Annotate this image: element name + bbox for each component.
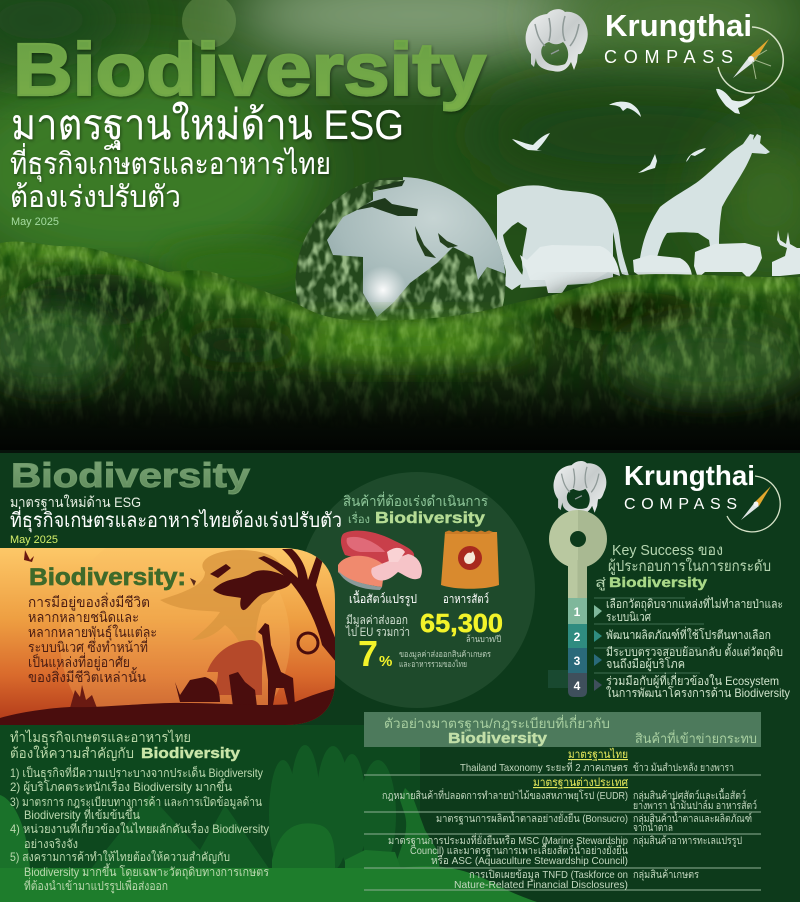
list: reasons: 4) หน่วยงานที่เกี่ยวข้องในไทยผลักดันเรื่อง Biodiversity xyxy=(10,820,269,836)
product labels: เนื้อสัตว์แปรรูป xyxy=(349,590,417,607)
stat: share of exports: 7 xyxy=(358,633,378,674)
stat: share of exports: และอาหารรวมของไทย xyxy=(399,659,467,669)
product name: COMPASS xyxy=(604,47,733,67)
subtitle line 1: มาตรฐานใหม่ด้าน ESG xyxy=(11,101,404,150)
row: international standards: ยางพารา น้ำมันปาล์ม อาหารสัตว์ xyxy=(633,798,757,812)
row: TNFD xyxy=(454,869,699,891)
icon: compass xyxy=(727,476,780,532)
heading: why it matters: ต้องให้ความสำคัญกับ xyxy=(10,745,134,761)
grass xyxy=(70,685,97,708)
Mediterranean xyxy=(357,198,418,216)
row: Bonsucro xyxy=(436,811,752,834)
icon: processed meat xyxy=(338,531,422,590)
stat: share of exports: % xyxy=(379,653,392,670)
icon: animal feed bag xyxy=(441,530,499,589)
circle heading: สินค้าที่ต้องเร่งดำเนินการ xyxy=(343,492,488,509)
logo: Krungthai Compass, hero xyxy=(526,8,783,93)
row: international standards: มาตรฐานต่างประเทศ xyxy=(533,777,629,789)
rhinoceros xyxy=(175,677,220,702)
heading: key success: Biodiversity xyxy=(609,574,707,590)
panel body text: การมีอยู่ของสิ่งมีชีวิต xyxy=(28,593,150,611)
row: Bonsucro: มาตรฐานการผลิตน้ำตาลอย่างยั่งยืน (Bonsucro) xyxy=(436,811,628,825)
moss texture xyxy=(0,242,800,420)
heading: why it matters: ทำไมธุรกิจเกษตรและอาหารไทย xyxy=(10,729,191,746)
step 1: ระบบนิเวศ xyxy=(606,610,651,624)
icon: crystal globe xyxy=(296,177,506,320)
reflected foliage xyxy=(295,180,507,330)
stat: export value: มีมูลค่าส่งออก xyxy=(346,613,408,628)
elephant xyxy=(497,185,629,290)
stat: export value: ล้านบาท/ปี xyxy=(466,634,501,644)
step 4 xyxy=(594,672,790,700)
rhinoceros xyxy=(520,245,620,293)
blurred forest background xyxy=(0,0,800,306)
icon: garuda emblem xyxy=(526,9,588,72)
list: reasons: ที่ต้องนำเข้ามาแปรรูปเพื่อส่งออก xyxy=(24,877,168,894)
section subtitle 2: ที่ธุรกิจเกษตรและอาหารไทยต้องเร่งปรับตัว xyxy=(10,506,342,533)
sun xyxy=(60,612,290,707)
faded tree xyxy=(160,550,282,642)
row: MSC and ASC xyxy=(388,833,742,867)
panel body text: ของสิ่งมีชีวิตเหล่านั้น xyxy=(28,667,146,685)
stat: share of exports xyxy=(358,633,491,674)
step 3 xyxy=(594,643,783,672)
panel body text: เป็นแหล่งที่อยู่อาศัย xyxy=(28,653,130,671)
row: Thai standards: ข้าว มันสำปะหลัง ยางพารา xyxy=(633,762,734,774)
list: reasons: 2) ผู้บริโภคตระหนักเรื่อง Biodiversity มากขึ้น xyxy=(10,778,232,795)
heading: why it matters xyxy=(10,729,240,762)
Red Sea xyxy=(415,226,436,258)
panel: definition of biodiversity xyxy=(0,548,335,725)
table header: Biodiversity xyxy=(448,731,547,747)
subtitle line 2: ที่ธุรกิจเกษตรและอาหารไทย xyxy=(10,143,331,183)
panel: hero photograph xyxy=(0,0,800,450)
faded elephant xyxy=(207,640,263,695)
row: MSC and ASC: หรือ ASC (Aquaculture Stewardship Council) xyxy=(431,854,628,867)
icon: key: 1 xyxy=(574,605,581,619)
panel body text: หลากหลายพันธุ์ในแต่ละ xyxy=(28,624,157,641)
stat: export value: ไป EU รวมกว่า xyxy=(345,625,410,639)
list: reasons xyxy=(10,764,269,894)
circle heading xyxy=(343,492,488,527)
acacia tree xyxy=(210,549,336,662)
list: reasons: อย่างจริงจัง xyxy=(24,837,78,851)
lion xyxy=(229,672,257,707)
table header: สินค้าที่เข้าข่ายกระทบ xyxy=(635,730,757,746)
giraffe xyxy=(258,623,295,705)
heading: why it matters: Biodiversity xyxy=(141,746,240,762)
table header: ตัวอย่างมาตรฐาน/กฎระเบียบที่เกี่ยวกับ xyxy=(384,715,610,732)
icon: key: 3 xyxy=(574,654,581,668)
icon: key xyxy=(548,510,607,697)
icon: white wildlife silhouettes xyxy=(497,134,800,293)
step 1 xyxy=(594,595,783,624)
row: MSC and ASC: Council) และมาตรฐานการเพาะเลี้ยงสัตว์น้ำอย่างยั่งยืน xyxy=(410,843,628,857)
row: Thai standards xyxy=(460,748,734,774)
list: reasons: 5) สงครามการค้าทำให้ไทยต้องให้ความสำคัญกับ xyxy=(10,850,230,864)
stat: share of exports: ของมูลค่าส่งออกสินค้าเกษตร xyxy=(399,649,491,660)
brand name: Krungthai xyxy=(605,8,752,43)
list: reasons: Biodiversity มากขึ้น โดยเฉพาะวัตถุดิบทางการเกษตร xyxy=(24,863,269,880)
stat: export value xyxy=(345,608,503,644)
row: TNFD: การเปิดเผยข้อมูล TNFD (Taskforce on xyxy=(469,869,628,881)
section subtitle 1: มาตรฐานใหม่ด้าน ESG xyxy=(10,494,141,511)
row: MSC and ASC: กลุ่มสินค้าอาหารทะเลแปรรูป xyxy=(633,835,742,847)
brand name: Krungthai xyxy=(624,460,755,491)
row: Thai standards: มาตรฐานไทย xyxy=(568,748,628,761)
icon: flying birds xyxy=(512,89,755,173)
row: international standards: กฎหมายสินค้าที่ปลอดการทำลายป่าไม้ของสหภาพยุโรป (EUDR) xyxy=(382,788,628,802)
title: Biodiversity: Biodiversity xyxy=(13,28,486,111)
section title: Biodiversity: Biodiversity xyxy=(11,457,250,495)
icon: garuda emblem xyxy=(554,461,606,514)
step 4: ร่วมมือกับผู้ที่เกี่ยวข้องใน Ecosystem xyxy=(606,672,779,689)
heading: key success xyxy=(595,542,771,591)
date: May 2025 xyxy=(11,216,59,228)
top rule of lower section xyxy=(0,450,800,453)
row: MSC and ASC: มาตรฐานการประมงที่ยั่งยืนหรือ MSC (Marine Stewardship xyxy=(388,833,628,847)
panel body text xyxy=(28,593,157,685)
table header xyxy=(364,712,761,747)
ground xyxy=(0,688,336,726)
list: reasons: Biodiversity ที่เข้มข้นขึ้น xyxy=(24,806,140,822)
product labels xyxy=(349,590,489,607)
logo: Krungthai Compass, lower xyxy=(554,460,780,532)
row: international standards xyxy=(382,777,757,812)
row: Bonsucro: กลุ่มสินค้าน้ำตาลและผลิตภัณฑ์ xyxy=(633,811,752,825)
step 3: จนถึงมือผู้บริโภค xyxy=(606,657,685,672)
heading: key success: ผู้ประกอบการในการยกระดับ xyxy=(608,557,771,575)
subtitle line 3: ต้องเร่งปรับตัว xyxy=(10,181,181,214)
row: international standards: กลุ่มสินค้าปศุสัตว์และเนื้อสัตว์ xyxy=(633,788,746,802)
circle heading: เรื่อง xyxy=(348,511,370,526)
birds xyxy=(24,550,34,562)
product labels: อาหารสัตว์ xyxy=(443,592,489,606)
section date: May 2025 xyxy=(10,534,58,546)
heading: key success: Key Success ของ xyxy=(612,542,723,559)
step 2: พัฒนาผลิตภัณฑ์ที่ใช้โปรตีนทางเลือก xyxy=(606,626,771,642)
product name: COMPASS xyxy=(624,496,737,513)
icon: compass xyxy=(718,27,783,93)
north reflection xyxy=(372,180,405,190)
icon: key: 2 xyxy=(574,630,581,644)
heading: key success: สู่ xyxy=(595,575,606,591)
panel body text: ระบบนิเวศ ซึ่งทำหน้าที่ xyxy=(28,638,148,655)
row: Bonsucro: จากน้ำตาล xyxy=(633,820,673,834)
list: key success steps xyxy=(594,595,790,700)
icon: key: 4 xyxy=(574,679,581,693)
circle heading: Biodiversity xyxy=(375,510,485,527)
bison xyxy=(694,243,762,278)
panel heading: Biodiversity: xyxy=(29,564,186,591)
row: TNFD: Nature-Related Financial Disclosures) xyxy=(454,879,628,891)
row: TNFD: กลุ่มสินค้าเกษตร xyxy=(633,869,699,881)
giraffe xyxy=(640,134,770,258)
row: Thai standards: Thailand Taxonomy ระยะที่ 2 ภาคเกษตร xyxy=(460,760,628,774)
moss foreground xyxy=(0,241,800,450)
stat: export value: 65,300 xyxy=(420,608,503,638)
list: reasons: 1) เป็นธุรกิจที่มีความเปราะบางจากประเด็น Biodiversity xyxy=(10,764,263,781)
antelope xyxy=(633,255,692,276)
panel body text: หลากหลายชนิดและ xyxy=(28,609,139,625)
panel: circle, products xyxy=(299,472,535,708)
green hill xyxy=(0,866,537,902)
list: reasons: 3) มาตรการ กฎระเบียบทางการค้า และการเปิดข้อมูลด้าน xyxy=(10,795,262,810)
table: standards and regulations xyxy=(364,712,761,891)
silver continent and ocean surface xyxy=(327,176,520,317)
deer xyxy=(772,230,800,276)
panel: lower section decoration, forest silhouettes xyxy=(0,725,537,902)
